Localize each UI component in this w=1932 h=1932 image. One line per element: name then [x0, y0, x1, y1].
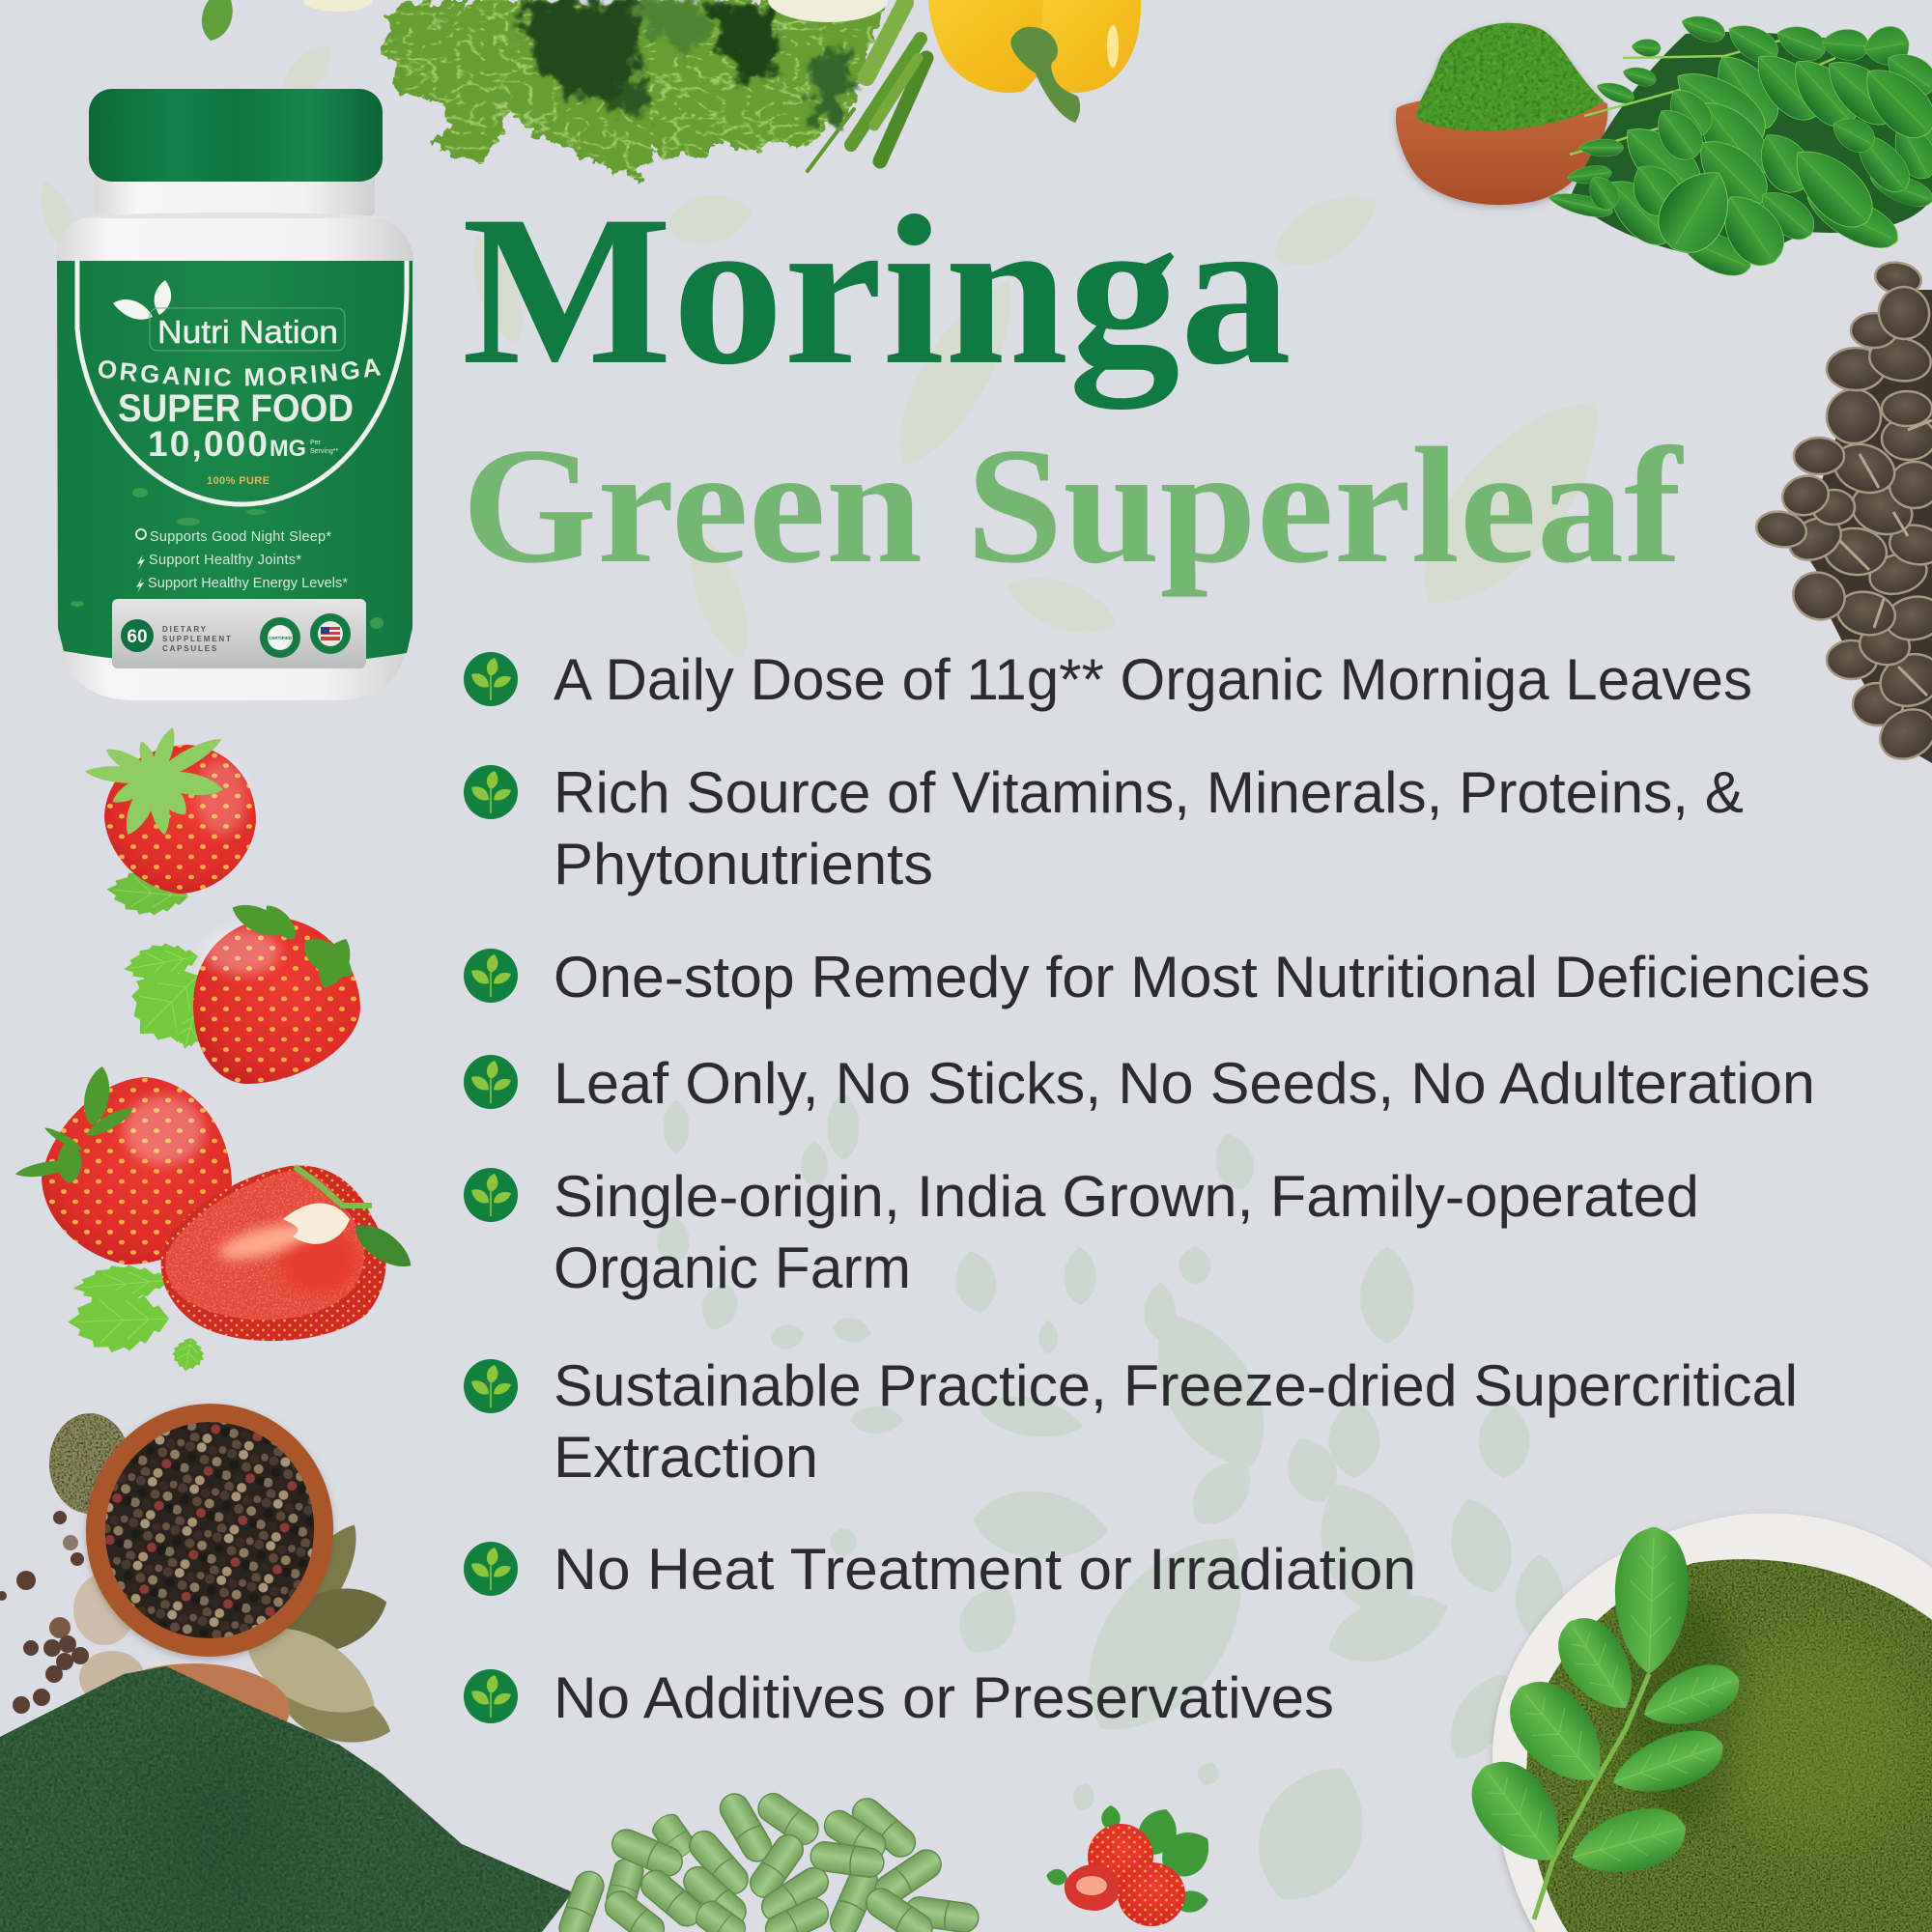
bullet 2: Phytonutrients: [554, 832, 933, 896]
strawberry 1: [85, 724, 256, 919]
brand logo: Nutri Nation: [157, 314, 338, 350]
clay dish behind powder: [97, 1663, 290, 1756]
watermark leaves, lower: [657, 1093, 1564, 1920]
ground pepper heap: [49, 1413, 130, 1514]
label bottom panel: [112, 599, 366, 668]
product bottle: [56, 89, 413, 700]
green onion stalks: [808, 3, 926, 171]
bullet 6: Sustainable Practice, Freeze-dried Supercritical: [554, 1353, 1798, 1418]
label benefits: Support Healthy Joints*: [149, 553, 301, 568]
label bottom panel: SUPPLEMENT: [162, 635, 233, 643]
strawberry 2: [112, 896, 360, 1084]
100 percent pure: 100% PURE: [207, 475, 270, 487]
label title: Serving**: [310, 448, 338, 455]
cauliflower fragment: [768, 0, 888, 22]
back capsules: [605, 1788, 980, 1932]
green capsules: [555, 1788, 980, 1932]
label title: 10,000: [148, 424, 268, 464]
bullet 5: Organic Farm: [554, 1236, 911, 1300]
moringa sprig: [1455, 1526, 1747, 1919]
moringa seed pile: [1753, 259, 1932, 769]
bullet 4: Leaf Only, No Sticks, No Seeds, No Adulteration: [554, 1051, 1815, 1116]
label benefits: Support Healthy Energy Levels*: [148, 576, 348, 591]
bullet 5: [464, 1164, 1699, 1300]
nutmeg and allspice: [0, 1511, 145, 1721]
top left stray leaf and cream fragment: [196, 0, 373, 44]
label bottom panel: CAPSULES: [162, 644, 218, 653]
wooden bowl of peppercorns: [66, 1384, 354, 1676]
bay leaves: [231, 1514, 399, 1756]
subtitle: Green Superleaf: Green Superleaf: [462, 414, 1684, 598]
bottle body: [56, 218, 413, 700]
pepper stem: [1010, 27, 1080, 123]
bullet 6: [464, 1353, 1798, 1490]
bullet 5: Single-origin, India Grown, Family-operated: [554, 1164, 1699, 1229]
moringa powder in clay bowl: [1396, 23, 1607, 205]
label arc: [77, 261, 407, 504]
brand logo: [113, 280, 345, 351]
label title: SUPER FOOD: [118, 387, 354, 430]
yellow bell pepper: [928, 0, 1141, 123]
front capsules: [555, 1825, 947, 1932]
bottle neck: [83, 169, 388, 224]
bullet 8: No Additives or Preservatives: [554, 1665, 1334, 1730]
bullet 1: A Daily Dose of 11g** Organic Morniga Leaves: [554, 647, 1752, 712]
bullet 2: [464, 760, 1744, 896]
moringa leaf pile: [1547, 11, 1932, 284]
bottle cap: [89, 89, 383, 182]
bullet 2: Rich Source of Vitamins, Minerals, Proteins, &: [554, 760, 1744, 825]
small strawberry trio: [1045, 1803, 1220, 1926]
label bottom panel: CERTIFIED: [269, 636, 293, 640]
bullet 7: No Heat Treatment or Irradiation: [554, 1537, 1416, 1602]
benefit list: [464, 647, 1870, 1730]
label flecks: [71, 488, 384, 629]
label benefits: [136, 529, 348, 593]
label title: ORGANIC MORINGA: [99, 358, 381, 386]
strawberry 3: [14, 1065, 232, 1264]
bullet 6: Extraction: [554, 1425, 818, 1490]
watermark leaves, upper: [32, 36, 1634, 666]
label bottom panel: 60: [127, 627, 148, 647]
title: Moringa: Moringa: [462, 172, 1292, 410]
lettuce and greens, top centre: [385, 0, 926, 177]
dark green powder mound: [0, 1666, 573, 1932]
bullet 3: One-stop Remedy for Most Nutritional Deficiencies: [554, 945, 1870, 1009]
label title: Per: [310, 440, 322, 446]
bottle label: [57, 261, 412, 667]
label title: MG: [270, 436, 306, 462]
label title: [99, 358, 381, 464]
white bowl of moringa powder: [1455, 1514, 1932, 1932]
halved strawberry: [67, 1166, 418, 1374]
label bottom panel: DIETARY: [162, 625, 208, 634]
label benefits: Supports Good Night Sleep*: [150, 529, 331, 545]
